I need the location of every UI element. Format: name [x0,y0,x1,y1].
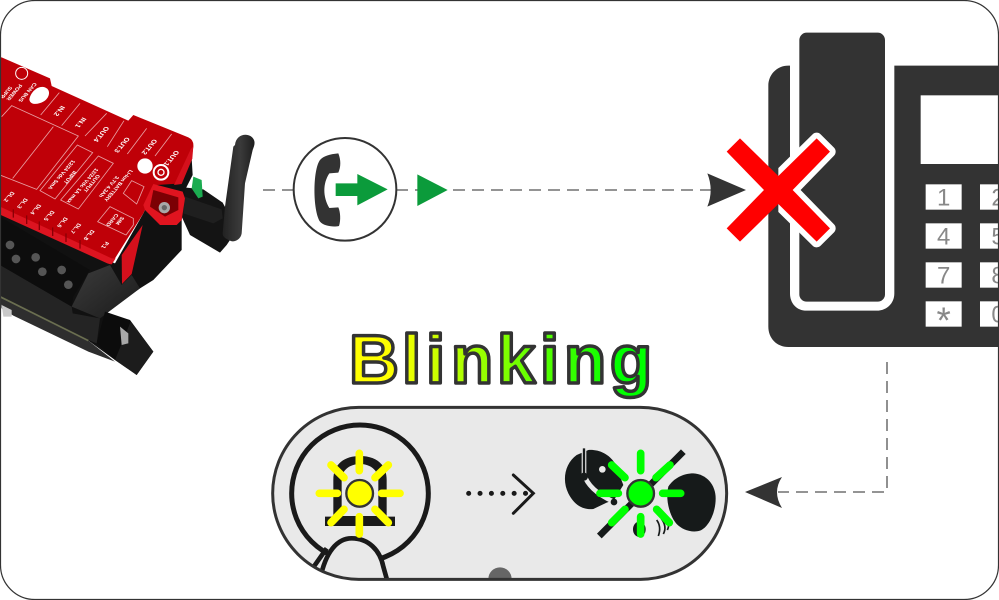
device silk-screen labels: DL.5 [42,210,55,221]
dashed connector: device to phone [263,189,712,191]
device silk-screen labels: DL.3 [15,197,28,209]
screen [921,95,999,164]
device silk-screen labels: DL.6 [55,216,68,228]
icon: finger press [313,538,388,583]
device silk-screen labels: DL.7 [68,222,82,234]
dashed connector: phone to blinking panel [778,362,887,492]
device silk-screen labels: 12/24 Vdc 1A max [65,167,99,204]
pill contents [292,425,716,591]
icon: red cross [727,138,830,242]
dotted arrow [466,490,528,496]
icon: alarm bell [325,456,395,526]
desk phone [707,33,999,347]
device silk-screen labels: CARD [104,213,119,227]
keypad: * [937,300,951,341]
arrowhead: into blinking panel [745,477,782,508]
device body [0,158,193,375]
call icon in circle [294,138,448,241]
heading: Blinking: Blinking [349,321,652,398]
device silk-screen labels: SIM [113,216,125,226]
device silk-screen labels: OUT.4 [91,125,110,143]
device silk-screen labels: DL.2 [2,191,15,202]
keypad: 7 [937,262,950,289]
circle outline [294,138,396,241]
device silk-screen labels: Li-Ion BATTERY [101,169,133,202]
device silk-screen labels [0,82,180,249]
device silk-screen labels: IN.2 [51,105,66,117]
device silk-screen labels: OUT.2 [139,138,158,155]
button ring [292,425,428,562]
icon: phone handset [314,153,340,226]
device silk-screen labels: POWER [4,83,23,101]
device silk-screen labels: CAN BUS [16,82,38,103]
device silk-screen labels: IN.1 [73,116,87,129]
keypad: 1 [937,184,950,211]
panel: LED status pill [273,407,727,591]
device silk-screen labels: DL.4 [28,203,42,216]
device silk-screen labels: DL.8 [82,229,95,241]
pill outline [273,407,727,579]
chevron [513,475,533,513]
handset [799,33,885,302]
device panel markings [0,93,172,235]
arrow: green direction triangle [417,174,448,206]
arrowhead: into phone [707,173,746,207]
device silk-screen labels: 3.7V 4.3Ah [97,175,120,198]
pill background [273,407,727,579]
arrow: outgoing call [336,174,388,205]
white outline of red cross [778,132,836,248]
phone body [768,66,999,347]
device silk-screen labels: P.1 [99,241,110,249]
device silk-screen labels: 12/24 Vdc 5mA [46,159,76,190]
antenna and connector [173,135,255,253]
device: red controller with antenna [0,57,255,375]
device silk-screen labels: OUT.1 [161,149,180,167]
device silk-screen labels: OUTPUT [81,174,101,193]
device silk-screen labels: OUT.3 [112,136,131,153]
keypad [926,184,999,341]
yellow LED [319,453,400,534]
indicator dot [488,567,512,578]
keypad: 4 [937,223,950,250]
green LED [600,453,681,534]
device red lid [0,57,193,284]
device silk-screen labels: INPUT [61,170,77,185]
icon: muted headset operator [565,448,716,537]
